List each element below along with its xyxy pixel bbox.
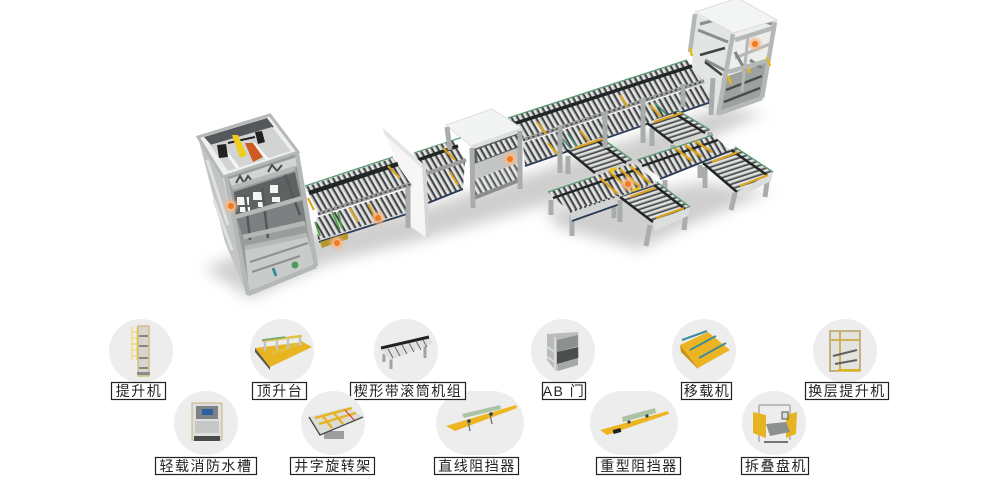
label: 换层提升机 <box>808 383 886 399</box>
label: 轻载消防水槽 <box>160 458 252 474</box>
left lifter tower <box>198 115 317 295</box>
icon: pallet stacker <box>753 405 797 442</box>
component: 直线阻挡器 <box>434 391 524 474</box>
long upper deck <box>508 60 704 140</box>
hotspot: transfer <box>622 178 634 190</box>
main conveyor system <box>198 0 777 295</box>
icon: heavy stopper <box>600 408 669 435</box>
component: 提升机 <box>109 319 173 400</box>
front conveyor D <box>548 163 657 236</box>
hotspot: jacking table <box>331 237 343 249</box>
icon: lifter <box>132 326 150 376</box>
jacking table under conveyor <box>320 233 348 248</box>
section 2 upper deck <box>414 136 466 174</box>
branch conveyor F <box>620 182 690 246</box>
icon: fire water tank <box>192 403 222 441</box>
floor shadows <box>205 108 770 298</box>
left upper deck <box>305 157 411 214</box>
hotspot: left lifter <box>225 200 237 212</box>
icon: transfer machine <box>680 331 730 369</box>
icon: cross rotary frame <box>309 407 363 439</box>
cross conveyor C <box>637 135 730 205</box>
component: 顶升台 <box>250 319 314 400</box>
component: 换层提升机 <box>806 319 888 400</box>
component: 移载机 <box>672 319 736 400</box>
right layer-change lifter, rear frame <box>690 13 777 115</box>
component: AB门 <box>531 319 595 400</box>
label: 楔形带滚筒机组 <box>354 383 462 399</box>
icon: wedge belt roller <box>380 337 433 369</box>
label: 拆叠盘机 <box>745 458 807 474</box>
hotspot: wedge roller <box>372 212 384 224</box>
AB door panel <box>383 128 430 237</box>
component: 楔形带滚筒机组 <box>350 319 466 400</box>
component: 轻载消防水槽 <box>156 391 256 474</box>
icon: layer lifter <box>830 331 860 372</box>
component: 拆叠盘机 <box>742 391 808 474</box>
label: AB 门 <box>543 383 585 399</box>
icon: linear stopper <box>446 405 517 431</box>
icon: jacking table <box>255 336 312 370</box>
hotspot: layer lifter <box>749 38 761 50</box>
branch conveyor A <box>567 137 632 188</box>
section 2 lower deck <box>425 162 465 203</box>
right lifter tower, front frame <box>690 0 777 115</box>
hotspot: AB door <box>504 153 516 165</box>
label: 直线阻挡器 <box>438 458 516 474</box>
AB door cabinet <box>446 109 522 208</box>
label: 提升机 <box>116 383 162 399</box>
component: 井字旋转架 <box>290 391 374 474</box>
label: 顶升台 <box>257 383 303 399</box>
left lower deck <box>315 186 410 242</box>
branch conveyor B <box>647 110 710 160</box>
long lower deck <box>523 85 714 166</box>
long conveyor posts <box>560 78 713 173</box>
component: 重型阻挡器 <box>590 391 680 474</box>
branch conveyor E <box>703 147 773 210</box>
label: 重型阻挡器 <box>600 458 678 474</box>
label: 井字旋转架 <box>294 458 372 474</box>
icon: AB door cabinet <box>547 332 579 371</box>
label: 移载机 <box>684 383 730 399</box>
